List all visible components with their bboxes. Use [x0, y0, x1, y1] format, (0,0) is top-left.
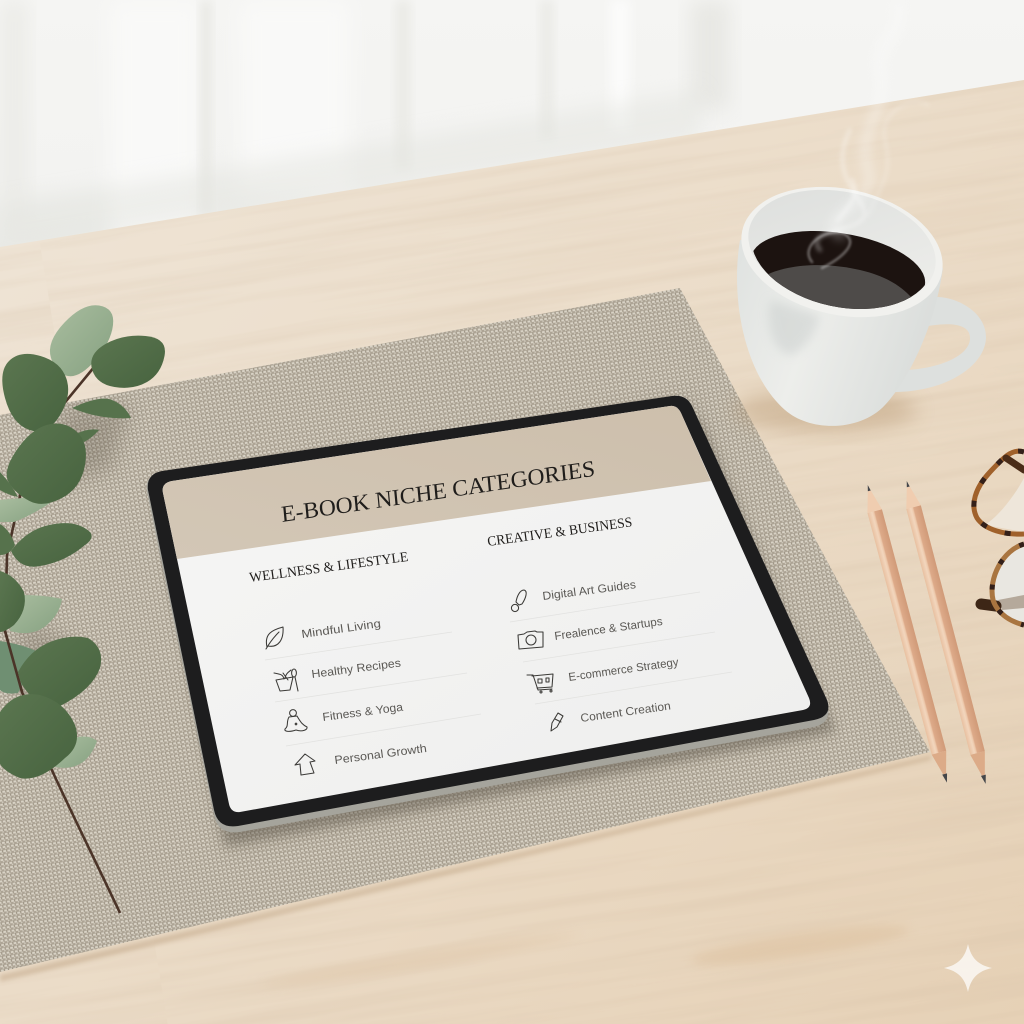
icon: pen — [551, 713, 563, 731]
tablet body — [147, 398, 828, 832]
item: Mindful Living — [266, 618, 382, 649]
leaf large lower — [0, 694, 77, 779]
cup shadow — [733, 388, 917, 432]
sparkle watermark — [944, 944, 992, 992]
item: Content Creation — [551, 700, 672, 731]
leaf pale top — [50, 305, 113, 376]
icon: camera — [518, 631, 543, 649]
tablet — [147, 396, 836, 846]
leaf centre upper — [7, 423, 86, 504]
pencil 2 — [899, 479, 993, 786]
item: Personal Growth: Personal Growth — [334, 743, 428, 767]
temple arm — [981, 604, 996, 606]
frame bottom — [992, 544, 1024, 625]
tablet bezel — [148, 396, 828, 826]
icon: paint brush — [511, 590, 526, 612]
cup body — [737, 240, 943, 426]
pencil 1 — [860, 483, 954, 785]
lens band — [998, 595, 1024, 610]
item: Digital Art Guides — [511, 579, 637, 612]
title: E-BOOK NICHE CATEGORIES — [280, 455, 596, 527]
icon: up arrow — [295, 754, 315, 775]
item: Freelance & Startups: Frealence & Startups — [554, 616, 664, 643]
icon: plant and spoon — [274, 669, 298, 691]
eyeglasses — [974, 451, 1024, 625]
item: Healthy Recipes — [274, 657, 402, 691]
eucalyptus branch — [0, 305, 165, 913]
placemat — [0, 288, 932, 982]
item: Fitness & Yoga — [285, 702, 404, 731]
leaf stem-top small — [0, 472, 18, 497]
item: Personal Growth — [295, 743, 428, 775]
icon: shopping cart — [527, 674, 553, 693]
leaf left mid — [0, 571, 25, 632]
cup rim — [729, 169, 955, 335]
lower stem — [5, 631, 22, 692]
header band — [163, 406, 711, 559]
item: Digital Art Guides: Digital Art Guides — [542, 579, 637, 603]
leaf lower right — [18, 637, 101, 706]
leaf teal back — [0, 641, 38, 694]
frame top — [974, 451, 1024, 534]
item: Freelance & Startups — [518, 616, 664, 649]
coffee — [753, 231, 926, 309]
leaf pale lower — [55, 736, 97, 768]
leaf small — [72, 399, 131, 418]
column heading: creative: CREATIVE & BUSINESS — [487, 515, 633, 550]
leaf upper right — [91, 336, 165, 388]
leaf pale mid — [10, 595, 62, 633]
lens 1 glare — [985, 478, 1024, 532]
icon: leaf — [266, 627, 283, 649]
item: E-commerce Strategy — [527, 657, 680, 693]
leaf pale left — [0, 497, 50, 522]
frame bridge — [1006, 458, 1024, 470]
leaf left small — [0, 524, 15, 555]
coffee cup — [731, 103, 986, 440]
tablet shadow — [155, 420, 836, 846]
cup interior — [737, 173, 947, 325]
steam — [809, 5, 928, 268]
item: Mindful Living: Mindful Living — [301, 618, 382, 641]
lens 2 fill — [995, 545, 1024, 625]
leaf tiny under — [78, 429, 99, 442]
cup handle — [886, 297, 986, 392]
column heading: wellness: WELLNESS & LIFESTYLE — [249, 550, 409, 586]
item: Content Creation: Content Creation — [580, 700, 672, 725]
leaf upper left — [2, 354, 68, 431]
coffee reflection — [768, 265, 911, 309]
item: Fitness & Yoga: Fitness & Yoga — [322, 702, 404, 724]
leaf mid right — [11, 523, 92, 567]
screen — [163, 406, 810, 812]
item: E-commerce Strategy: E-commerce Strategy — [568, 657, 680, 684]
item: Healthy Recipes: Healthy Recipes — [311, 657, 402, 681]
background: curtain window — [0, 0, 1024, 250]
stem — [5, 366, 120, 913]
cup reflection — [769, 300, 820, 355]
icon: yoga figure — [285, 710, 307, 731]
